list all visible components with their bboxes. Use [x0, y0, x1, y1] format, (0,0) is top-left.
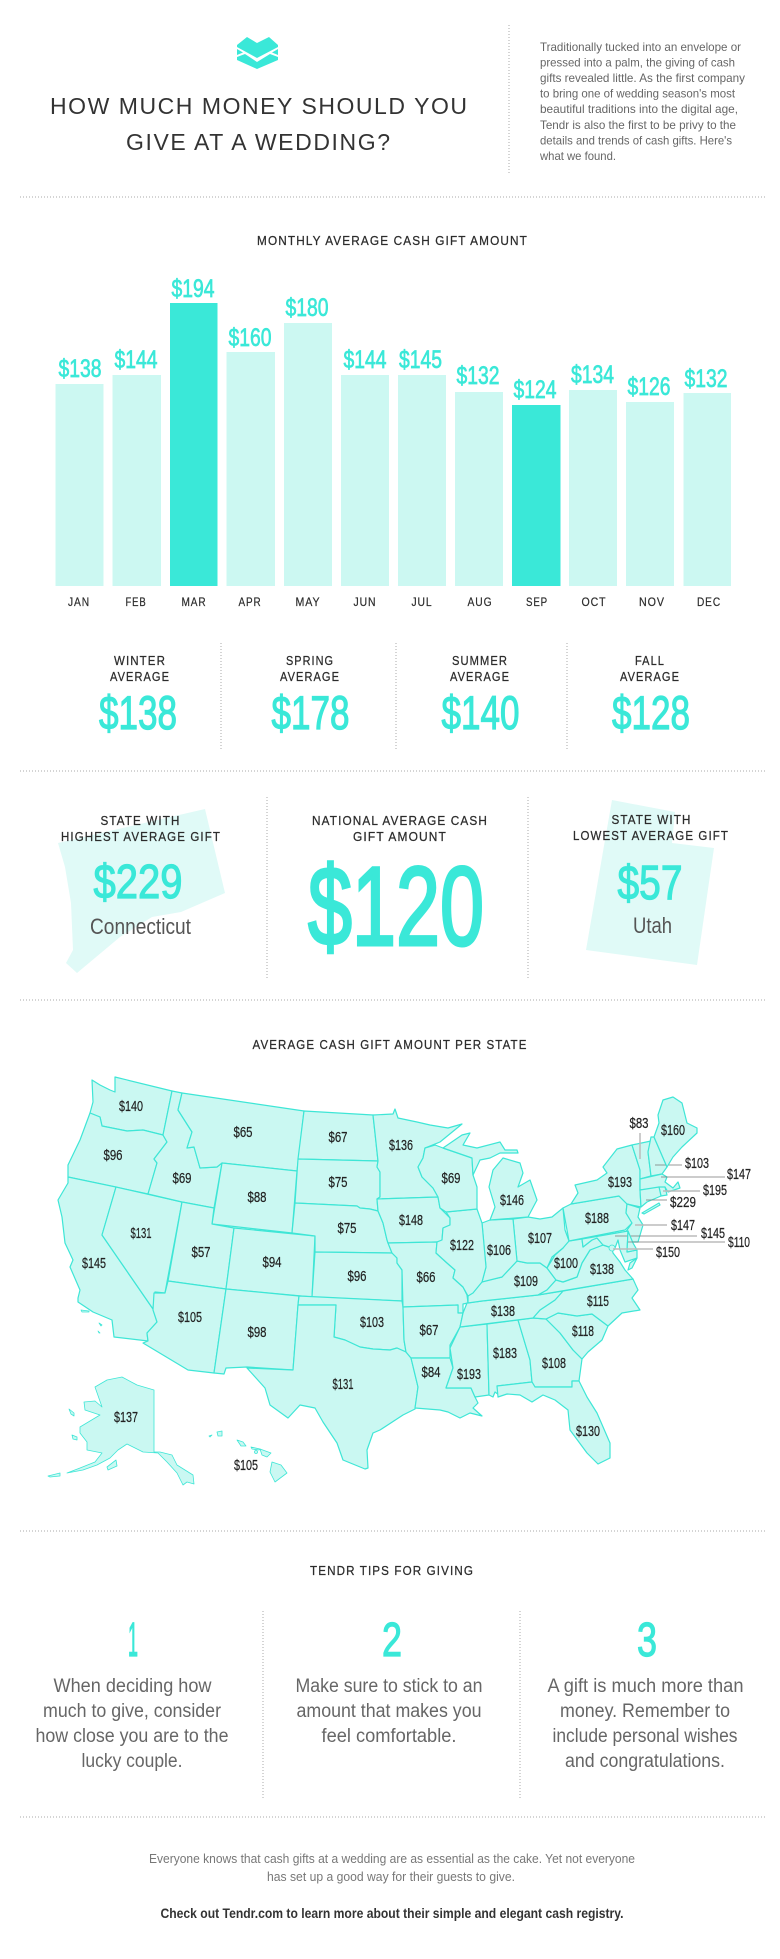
- state: Idaho: $69: [172, 1171, 192, 1187]
- stat: summer average: [442, 654, 520, 739]
- bar: July: [398, 346, 446, 609]
- heading: tips: TENDR TIPS FOR GIVING: [310, 1564, 474, 1578]
- state: New Jersey: [625, 1204, 695, 1242]
- bar: April: $160: [228, 324, 272, 352]
- state: Montana: [178, 1093, 304, 1171]
- state: Nebraska: $75: [338, 1221, 356, 1237]
- state: Florida: [497, 1381, 610, 1464]
- state: North Carolina: [533, 1279, 640, 1326]
- bar: August: $132: [456, 362, 500, 390]
- state: Ohio: [513, 1208, 569, 1268]
- state: Maryland: [582, 1226, 725, 1262]
- state: District of Columbia: [609, 1245, 680, 1261]
- California islands: [81, 1310, 102, 1333]
- state: California: $145: [82, 1256, 106, 1272]
- title: HOW MUCH MONEY SHOULD YOU: [50, 93, 467, 119]
- label: highest average gift: STATE WITH: [100, 814, 180, 828]
- state: Colorado: [226, 1228, 315, 1297]
- bar: May: [284, 294, 332, 609]
- bar: November: NOV: [639, 597, 665, 609]
- state: Missouri: [388, 1242, 468, 1313]
- bar: February: FEB: [126, 597, 146, 609]
- bar: July: JUL: [412, 597, 432, 609]
- icon: Utah shape: [586, 800, 714, 965]
- title: [50, 93, 467, 155]
- bar: October: OCT: [582, 597, 606, 609]
- bar: May: MAY: [296, 597, 320, 609]
- bar chart: monthly averages: [56, 275, 731, 609]
- bar: November: $126: [628, 373, 670, 401]
- state: Hawaii: [209, 1431, 287, 1482]
- state: Tennessee: $138: [491, 1304, 515, 1320]
- stat: summer average: $140: [442, 686, 520, 739]
- state name: Connecticut: [90, 914, 191, 939]
- stat: fall average: FALL: [635, 654, 665, 668]
- state: Delaware: [627, 1231, 750, 1252]
- state: Arizona: $105: [178, 1310, 202, 1326]
- stat: summer average: AVERAGE: [450, 670, 510, 684]
- state: New York: $193: [608, 1175, 632, 1191]
- bar: March: $194: [172, 275, 215, 303]
- state: Pennsylvania: $188: [585, 1211, 609, 1227]
- label: national average: [312, 814, 488, 844]
- state: South Dakota: [295, 1159, 380, 1211]
- icon: Connecticut shape: [58, 809, 225, 973]
- state: New Hampshire: [648, 1137, 709, 1176]
- state: West Virginia: [547, 1238, 603, 1282]
- bar: February: $144: [114, 346, 158, 374]
- state: New Hampshire: $103: [685, 1156, 709, 1172]
- state name: Utah: [633, 913, 672, 938]
- tip 1: [36, 1614, 228, 1772]
- bar: September: SEP: [526, 597, 548, 609]
- state: Hawaii: $105: [234, 1458, 258, 1474]
- value: $229: $229: [94, 856, 182, 909]
- state: Rhode Island: [659, 1183, 727, 1199]
- state: Washington: $140: [119, 1099, 143, 1115]
- bar: January: JAN: [68, 597, 90, 609]
- tip text: and congratulations.: [565, 1751, 725, 1772]
- state: Virginia: $138: [590, 1262, 614, 1278]
- bar: March: MAR: [182, 597, 206, 609]
- state: Mississippi: [446, 1324, 489, 1397]
- bar: April: [226, 324, 275, 609]
- state: New Jersey: $147: [671, 1218, 695, 1234]
- state: Massachusetts: $147: [727, 1167, 751, 1183]
- intro paragraph: what we found.: [539, 149, 616, 163]
- state: Minnesota: [373, 1109, 462, 1199]
- state: District of Columbia: $150: [656, 1245, 680, 1261]
- tip text: Make sure to stick to an: [296, 1676, 482, 1697]
- state: North Dakota: $67: [328, 1130, 348, 1146]
- state: Georgia: $108: [542, 1356, 566, 1372]
- state: Iowa: $148: [399, 1213, 423, 1229]
- state: Michigan: $146: [500, 1193, 524, 1209]
- state: Nebraska: [292, 1203, 392, 1253]
- state: West Virginia: $100: [554, 1256, 578, 1272]
- state: Wisconsin: $69: [442, 1171, 460, 1187]
- state: New Mexico: $98: [248, 1325, 266, 1341]
- tip text: much to give, consider: [43, 1701, 222, 1722]
- icon: tendr logo: [237, 37, 278, 69]
- map: average gift per state: [48, 1077, 751, 1485]
- state: Iowa: [377, 1197, 450, 1243]
- tip text: money. Remember to: [560, 1701, 730, 1722]
- state: Wyoming: [212, 1163, 297, 1233]
- label: lowest average gift: [573, 813, 729, 843]
- state: Rhode Island: $195: [703, 1183, 727, 1199]
- state: New York: [571, 1145, 660, 1214]
- state: Idaho: [148, 1091, 222, 1208]
- state: Oregon: $96: [104, 1148, 122, 1164]
- state: Oklahoma: $103: [360, 1315, 384, 1331]
- heading: monthly average: MONTHLY AVERAGE CASH GIFT AMOUNT: [257, 234, 528, 248]
- label: lowest average gift: LOWEST AVERAGE GIFT: [573, 829, 729, 843]
- tip text: When deciding how: [54, 1676, 212, 1697]
- stat: spring average: SPRING: [286, 654, 334, 668]
- state: Ohio: $107: [528, 1231, 552, 1247]
- bar: January: [56, 355, 104, 609]
- value: $57: $57: [618, 857, 682, 910]
- number 2: 2: [382, 1614, 402, 1667]
- state: Connecticut: [640, 1187, 696, 1211]
- state: Vermont: [630, 1116, 651, 1179]
- intro paragraph: [539, 40, 745, 163]
- bar: August: AUG: [468, 597, 492, 609]
- stat: winter average: AVERAGE: [110, 670, 170, 684]
- stat: winter average: WINTER: [114, 654, 166, 668]
- stat: spring average: $178: [272, 686, 350, 739]
- state: Connecticut: $229: [670, 1195, 696, 1211]
- state: Georgia: [518, 1318, 582, 1387]
- tip text: include personal wishes: [552, 1726, 738, 1747]
- title: GIVE AT A WEDDING?: [126, 129, 390, 155]
- panel: national average: [308, 814, 488, 969]
- stat: spring average: AVERAGE: [280, 670, 340, 684]
- intro paragraph: Tendr is also the first to be privy to the: [540, 118, 736, 132]
- panel: lowest state Utah: [573, 800, 729, 965]
- state: Texas: [247, 1305, 418, 1469]
- bar: September: $124: [514, 376, 557, 404]
- bar: June: $144: [344, 346, 387, 374]
- state: Nevada: [102, 1187, 182, 1309]
- state: Delaware: $110: [728, 1235, 750, 1251]
- number 3: 3: [637, 1614, 657, 1667]
- bar: April: APR: [238, 597, 262, 609]
- state: Kentucky: $109: [514, 1274, 538, 1290]
- state: North Dakota: [298, 1111, 378, 1161]
- intro paragraph: gifts revealed little. As the first company: [540, 71, 745, 85]
- state: Mississippi: $193: [457, 1367, 481, 1383]
- intro paragraph: to bring one of wedding season's most: [540, 86, 736, 100]
- state: Washington: [90, 1077, 172, 1135]
- tip 3: [548, 1614, 744, 1772]
- state: Alabama: [487, 1320, 532, 1397]
- intro paragraph: beautiful traditions into the digital age,: [540, 102, 738, 116]
- state: New Mexico: [214, 1289, 299, 1374]
- state: North Carolina: $115: [587, 1294, 609, 1310]
- label: national average: GIFT AMOUNT: [353, 830, 447, 844]
- state: Montana: $65: [234, 1125, 252, 1141]
- state: Illinois: [436, 1209, 486, 1296]
- intro paragraph: pressed into a palm, the giving of cash: [540, 56, 735, 70]
- bar: September: [512, 376, 560, 609]
- call to action: Check out Tendr.com to learn more about their simple and elegant cash registry.: [160, 1906, 624, 1921]
- state: Alabama: $183: [493, 1346, 517, 1362]
- state: Wisconsin: [418, 1145, 477, 1212]
- bar: March: [170, 275, 218, 609]
- bar: November: [626, 373, 674, 609]
- state: Utah: [168, 1202, 234, 1289]
- state: Arkansas: $67: [420, 1323, 438, 1339]
- label: highest average gift: [61, 814, 221, 844]
- tip text: A gift is much more than: [548, 1676, 744, 1697]
- tip 2: [296, 1614, 482, 1747]
- label: highest average gift: HIGHEST AVERAGE GIFT: [61, 830, 221, 844]
- state: Indiana: $106: [487, 1243, 511, 1259]
- state: Vermont: $83: [630, 1116, 648, 1132]
- state: Louisiana: [411, 1358, 482, 1418]
- state: Massachusetts: [640, 1167, 751, 1192]
- state: Virginia: [538, 1245, 637, 1295]
- tip text: [548, 1676, 744, 1772]
- state: Kansas: $96: [348, 1269, 366, 1285]
- state: Utah: $57: [192, 1245, 210, 1261]
- bar: December: $132: [684, 365, 728, 393]
- state: Alaska: $137: [114, 1410, 138, 1426]
- tip text: [36, 1676, 228, 1772]
- state: Arizona: [143, 1281, 226, 1373]
- value: $120: $120: [308, 844, 484, 969]
- label: lowest average gift: STATE WITH: [612, 813, 692, 827]
- tip 1: 1: [128, 1614, 138, 1667]
- stat: fall average: $128: [612, 686, 690, 739]
- intro paragraph: details and trends of cash gifts. Here's: [540, 134, 732, 148]
- tip text: [296, 1676, 482, 1747]
- state: Maryland: $145: [701, 1226, 725, 1242]
- state: California: [58, 1177, 157, 1341]
- bar: June: [341, 346, 389, 609]
- stat: winter average: [99, 654, 177, 739]
- state: Arkansas: [403, 1305, 463, 1358]
- state: Maine: [654, 1097, 697, 1167]
- state: Alaska: [48, 1377, 194, 1485]
- bar: June: JUN: [354, 597, 376, 609]
- state: Louisiana: $84: [422, 1365, 440, 1381]
- label: national average: NATIONAL AVERAGE CASH: [312, 814, 488, 828]
- state: Kentucky: [468, 1261, 556, 1303]
- state: Pennsylvania: [563, 1196, 632, 1241]
- tip text: amount that makes you: [296, 1701, 482, 1722]
- state: Texas: $131: [332, 1377, 354, 1393]
- stat: fall average: [612, 654, 690, 739]
- bar: January: $138: [58, 355, 102, 383]
- state: Florida: $130: [576, 1424, 600, 1440]
- state: Wyoming: $88: [248, 1190, 266, 1206]
- bar: May: $180: [286, 294, 328, 322]
- bar: July: $145: [399, 346, 442, 374]
- bar: October: [569, 361, 617, 609]
- state: Oregon: [68, 1113, 167, 1194]
- state: Illinois: $122: [450, 1238, 474, 1254]
- footer text: has set up a good way for their guests to give.: [267, 1869, 515, 1884]
- bar: February: [112, 346, 161, 609]
- state: South Carolina: [546, 1313, 608, 1359]
- bar: October: $134: [571, 361, 614, 389]
- stat: fall average: AVERAGE: [620, 670, 680, 684]
- bar: December: DEC: [697, 597, 721, 609]
- stat: spring average: [272, 654, 350, 739]
- intro paragraph: Traditionally tucked into an envelope or: [540, 40, 741, 54]
- footer text: Everyone knows that cash gifts at a wedding are as essential as the cake. Yet not everyone: [149, 1851, 635, 1866]
- stat: summer average: SUMMER: [452, 654, 508, 668]
- state: South Carolina: $118: [572, 1324, 594, 1340]
- state: Michigan: [443, 1133, 537, 1220]
- footer text: [149, 1851, 635, 1884]
- state: Colorado: $94: [262, 1255, 282, 1271]
- state: Indiana: [482, 1219, 517, 1282]
- state: South Dakota: $75: [328, 1175, 348, 1191]
- tip text: lucky couple.: [82, 1751, 182, 1772]
- state: Minnesota: $136: [389, 1138, 413, 1154]
- state: Nevada: $131: [130, 1226, 152, 1242]
- heading: per state: AVERAGE CASH GIFT AMOUNT PER STATE: [252, 1038, 528, 1052]
- state: Missouri: $66: [416, 1270, 436, 1286]
- state: Maine: $160: [661, 1123, 685, 1139]
- stat: winter average: $138: [99, 686, 177, 739]
- bar: August: [455, 362, 503, 609]
- state: Oklahoma: [298, 1296, 406, 1352]
- tip text: how close you are to the: [36, 1726, 228, 1747]
- state: Tennessee: [460, 1291, 563, 1327]
- panel: highest state Connecticut: [58, 809, 225, 973]
- tip text: feel comfortable.: [322, 1726, 456, 1747]
- state: Kansas: [312, 1252, 402, 1301]
- bar: December: [684, 365, 731, 609]
